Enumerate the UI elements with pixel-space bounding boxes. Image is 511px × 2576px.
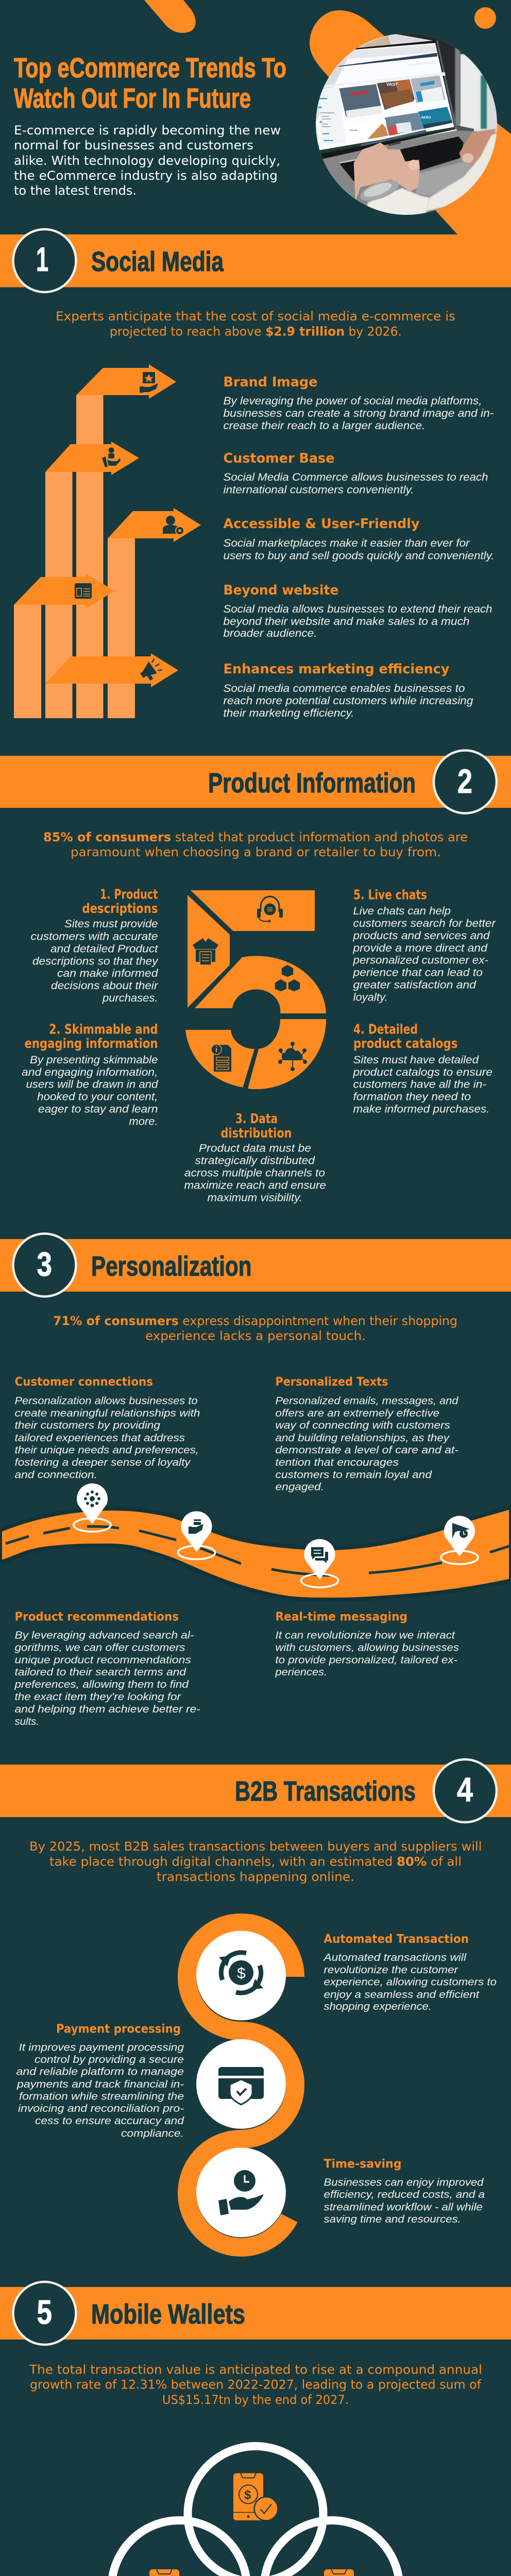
benefit: Customer Base: international customers conveniently.	[224, 484, 414, 496]
icon: headset chat	[257, 896, 283, 922]
intro paragraph: to the latest trends.	[14, 183, 137, 198]
feature: Customer connections: Customer connections	[14, 1376, 153, 1389]
feature: 5. Live chats: Live chats can help	[353, 905, 451, 917]
feature: Customer connections: their customers by providing	[14, 1420, 160, 1431]
diagram: S-shaped ribbon with icons	[187, 1923, 295, 2247]
feature: Customer connections: fostering a deeper sense of loyalty	[14, 1457, 191, 1468]
feature: Automated Transaction	[323, 1933, 497, 2012]
feature: 3. Data distribution: maximum visibility.	[207, 1192, 302, 1204]
feature: Automated Transaction: revolutionize the customer	[323, 1964, 458, 1976]
intro: B2B statistic: By 2025, most B2B sales transactions between buyers and suppliers will	[29, 1839, 482, 1854]
feature: Personalized Texts: Personalized Texts	[275, 1376, 388, 1389]
feature: Personalized Texts: and building relationships, as they	[275, 1432, 450, 1444]
feature: 2. Skimmable and engaging information: engaging information	[25, 1036, 158, 1052]
feature: Customer connections	[14, 1376, 200, 1481]
feature: 5. Live chats	[352, 887, 496, 1004]
benefit: Enhances marketing efficiency	[224, 662, 473, 719]
intro: mobile wallets statistic	[29, 2363, 482, 2407]
feature: Customer connections: their unique needs and preferences,	[14, 1445, 199, 1456]
feature: 4. Detailed product catalogs: 4. Detailed	[353, 1022, 418, 1038]
icon: user with gear	[163, 516, 184, 535]
icon: customer base	[102, 447, 121, 467]
icon: cloud network	[278, 1042, 307, 1071]
intro: mobile wallets statistic: The total transaction value is anticipated to rise at a compound annual	[29, 2363, 482, 2377]
feature: 2. Skimmable and engaging information: eager to stay and learn	[38, 1104, 158, 1115]
icon: automated dollar cycle	[219, 1953, 263, 1993]
icon: phone payment failed	[149, 2569, 194, 2576]
feature: Product recommendations: Product recommendations	[14, 1611, 179, 1624]
feature: Automated Transaction: enjoy a seamless and efficient	[323, 1989, 480, 2001]
feature: 1. Product descriptions: decisions about their	[51, 980, 159, 992]
benefit: Beyond website	[224, 583, 492, 639]
benefit: Brand Image	[224, 375, 493, 432]
feature: 1. Product descriptions: descriptions so that they	[32, 955, 159, 968]
section band: 3 Personalization: 3	[37, 1245, 52, 1283]
feature: Time-saving: streamlined workflow - all while	[323, 2202, 483, 2213]
benefit: Customer Base: Social Media Commerce allows businesses to reach	[224, 471, 488, 483]
title	[14, 53, 286, 114]
feature: 2. Skimmable and engaging information	[22, 1022, 159, 1127]
benefit: Brand Image: By leveraging the power of social media platforms,	[224, 395, 482, 407]
feature: 5. Live chats: customers search for better	[353, 918, 496, 929]
feature: 1. Product descriptions	[31, 887, 159, 1004]
section band: 4 B2B Transactions: 4	[457, 1770, 473, 1808]
pin: real-time messaging	[441, 1516, 478, 1564]
feature: Product recommendations: gorithms, we can offer customers	[14, 1642, 185, 1654]
feature: Personalized Texts: engaged.	[275, 1482, 324, 1493]
intro: social media statistic: projected to reach above $2.9 trillion by 2026.	[110, 325, 402, 339]
feature: Real-time messaging: Real-time messaging	[275, 1611, 407, 1624]
intro paragraph: E-commerce is rapidly becoming the new	[14, 123, 281, 138]
feature: 3. Data distribution: across multiple channels to	[184, 1167, 325, 1179]
feature: Payment processing: formation while streamlining the	[19, 2091, 184, 2102]
feature: 1. Product descriptions: and detailed Product	[50, 943, 159, 955]
feature: 3. Data distribution: 3. Data	[235, 1111, 278, 1127]
feature: Customer connections: create meaningful relationships with	[14, 1408, 200, 1419]
feature: Real-time messaging: to provide personalized, tailored ex-	[275, 1655, 457, 1666]
intro: product information statistic	[43, 830, 468, 859]
intro: personalization statistic: experience lacks a personal touch.	[145, 1329, 366, 1343]
icon: automated dollar cycle: $	[237, 1965, 246, 1982]
feature: Customer connections: and connection.	[14, 1469, 97, 1481]
benefit: Brand Image: Brand Image	[224, 375, 317, 390]
feature: Personalized Texts: offers are an extremely effective	[275, 1408, 439, 1419]
feature: Personalized Texts: demonstrate a level of care and at-	[275, 1445, 458, 1456]
section band: 5 Mobile Wallets: Mobile Wallets	[91, 2299, 245, 2330]
feature: Payment processing: invoicing and reconciliation pro-	[18, 2103, 184, 2114]
feature: 5. Live chats: greater satisfaction and	[353, 979, 476, 991]
decorative dot	[474, 7, 496, 29]
feature: 4. Detailed product catalogs: make informed purchases.	[353, 1104, 489, 1115]
feature: Payment processing: cess to ensure accuracy and	[35, 2115, 184, 2127]
icon: stacked cubes	[275, 964, 300, 992]
benefit: Customer Base: Customer Base	[224, 451, 335, 466]
icon: card with shield	[218, 2067, 264, 2105]
feature: Time-saving: saving time and resources.	[323, 2214, 461, 2225]
section band: 5 Mobile Wallets: 5	[37, 2293, 52, 2331]
benefit: Enhances marketing efficiency: reach more potential customers while increasing	[224, 695, 473, 707]
feature: 4. Detailed product catalogs: Sites must have detailed	[353, 1054, 479, 1066]
feature: 3. Data distribution: maximize reach and ensure	[184, 1180, 326, 1191]
section band: 2 Product Information: 2	[457, 762, 472, 800]
feature: 3. Data distribution: Product data must be	[199, 1143, 311, 1154]
benefit: Enhances marketing efficiency: Social media commerce enables businesses to	[224, 683, 465, 694]
feature: Payment processing: control by providing a secure	[35, 2054, 184, 2065]
pin: product recommendations	[178, 1511, 215, 1559]
intro: mobile wallets statistic: US$15.17tn by the end of 2027.	[162, 2393, 349, 2407]
intro paragraph: alike. With technology developing quickly,	[14, 154, 280, 168]
feature: Payment processing: and reliable platform to manage	[16, 2066, 184, 2077]
feature: 5. Live chats: perience that can lead to	[352, 967, 483, 979]
feature: 1. Product descriptions: purchases.	[102, 992, 158, 1004]
benefit: Accessible & User-Friendly: Social marketplaces make it easier than ever for	[224, 537, 470, 549]
section band: 4 B2B Transactions: B2B Transactions	[235, 1776, 416, 1807]
feature: Customer connections: Personalization allows businesses to	[14, 1395, 198, 1406]
feature: Automated Transaction: Automated Transaction	[323, 1933, 469, 1946]
feature: Real-time messaging: with customers, allowing businesses	[275, 1642, 459, 1654]
benefit: Enhances marketing efficiency: their marketing efficiency.	[224, 707, 354, 719]
diagram: winding road with map pins	[0, 1483, 511, 1600]
feature: 3. Data distribution: distribution	[220, 1126, 292, 1141]
section band: 3 Personalization	[0, 1233, 511, 1296]
feature: Time-saving: efficiency, reduced costs, and a	[323, 2189, 485, 2200]
pin: customer connections	[74, 1483, 111, 1532]
benefit: Accessible & User-Friendly	[224, 516, 495, 562]
feature: 4. Detailed product catalogs: product catalogs	[353, 1036, 457, 1052]
feature: Personalized Texts	[275, 1376, 458, 1493]
benefit: Brand Image: businesses can create a strong brand image and in-	[224, 408, 493, 419]
icon: phone payment success: $	[244, 2488, 251, 2502]
feature: Time-saving: Businesses can enjoy improved	[323, 2177, 484, 2189]
icon: phone payment success	[233, 2473, 278, 2520]
photo: hands typing on a laptop: Launch	[349, 129, 357, 131]
intro: B2B statistic: transactions happening online.	[157, 1870, 354, 1884]
panel: header	[14, 0, 511, 237]
feature: 5. Live chats: 5. Live chats	[353, 887, 427, 903]
intro: social media statistic: Experts anticipate that the cost of social media e-commerce is	[56, 309, 455, 324]
intro: B2B statistic: take place through digital channels, with an estimated 80% of all	[49, 1855, 462, 1869]
feature: Real-time messaging	[275, 1611, 459, 1678]
feature: 1. Product descriptions: customers with accurate	[31, 930, 158, 943]
feature: Product recommendations: and helping them achieve better re-	[14, 1704, 200, 1715]
icon: info document	[211, 1044, 231, 1072]
feature: 2. Skimmable and engaging information: more.	[129, 1116, 158, 1127]
section band: 1 Social Media	[0, 229, 511, 292]
feature: Personalized Texts: customers to remain loyal and	[275, 1469, 432, 1481]
feature: Product recommendations: unique product recommendations	[14, 1655, 191, 1666]
feature: 4. Detailed product catalogs: customers have all the in-	[353, 1079, 486, 1090]
feature: 1. Product descriptions: can make informed	[57, 968, 159, 979]
chart: rising arrows	[14, 364, 201, 718]
decorative capsule top	[144, 0, 196, 33]
icon: phone payment warning	[324, 2569, 369, 2576]
feature: 2. Skimmable and engaging information: hooked to your content,	[37, 1091, 158, 1103]
feature: 2. Skimmable and engaging information: and engaging information,	[22, 1066, 158, 1078]
section band: 1 Social Media: Social Media	[91, 246, 224, 277]
intro: product information statistic: paramount when choosing a brand or retailer to buy from.	[71, 845, 441, 859]
feature: Product recommendations: the exact item they're looking for	[14, 1691, 182, 1703]
icon: hand holding clock	[218, 2170, 264, 2215]
intro: mobile wallets statistic: growth rate of 12.31% between 2022-2027, leading to a projected sum of	[30, 2377, 482, 2392]
feature: 1. Product descriptions: Sites must provide	[64, 918, 158, 930]
intro: personalization statistic	[53, 1314, 457, 1343]
feature: 5. Live chats: loyalty.	[353, 991, 387, 1004]
section band: 5 Mobile Wallets	[0, 2282, 511, 2345]
intro: product information statistic: 85% of consumers stated that product information and photos are	[43, 830, 468, 844]
feature: Product recommendations: sults.	[14, 1716, 39, 1727]
feature: Payment processing	[16, 2023, 184, 2139]
feature: Product recommendations	[14, 1611, 200, 1727]
benefit: Beyond website: Social media allows businesses to extend their reach	[224, 603, 492, 615]
feature: Automated Transaction: Automated transactions will	[323, 1952, 467, 1963]
pin: personalized texts	[301, 1539, 338, 1587]
feature: 2. Skimmable and engaging information: 2. Skimmable and	[49, 1022, 158, 1038]
feature: Automated Transaction: shopping experience.	[323, 2001, 432, 2012]
icon: brand image	[140, 372, 158, 393]
title: Watch Out For In Future	[14, 83, 251, 114]
feature: Payment processing: payments and track financial in-	[16, 2079, 184, 2090]
feature: Product recommendations: tailored to their search terms and	[14, 1667, 186, 1678]
feature: Time-saving	[323, 2158, 485, 2225]
diagram: three interlocking rings with phone icons	[111, 2446, 400, 2576]
benefit: Accessible & User-Friendly: Accessible & User-Friendly	[224, 516, 420, 532]
benefit: Beyond website: broader audience.	[224, 628, 317, 639]
icon: megaphone	[138, 657, 164, 683]
intro paragraph	[14, 123, 281, 198]
feature: Payment processing: Payment processing	[56, 2023, 181, 2036]
section band: 1 Social Media: 1	[36, 240, 48, 278]
decorative capsule behind photo	[310, 10, 511, 237]
photo: hands typing on a laptop: AERO	[421, 116, 431, 120]
feature: Real-time messaging: It can revolutionize how we interact	[275, 1630, 456, 1641]
feature: Customer connections: tailored experiences that address	[14, 1432, 185, 1444]
feature: 3. Data distribution: strategically distributed	[195, 1155, 315, 1166]
feature: 5. Live chats: provide a more direct and	[352, 942, 488, 954]
section band: 2 Product Information: Product Information	[208, 768, 416, 799]
feature: 4. Detailed product catalogs: formation they need to	[353, 1091, 471, 1103]
intro: B2B statistic	[29, 1839, 482, 1884]
section band: 2 Product Information	[0, 750, 511, 813]
benefit: Customer Base	[224, 451, 488, 496]
benefit: Accessible & User-Friendly: users to buy and sell goods quickly and conveniently.	[224, 550, 495, 562]
section band: 4 B2B Transactions	[0, 1759, 511, 1822]
feature: 1. Product descriptions: descriptions	[82, 901, 158, 917]
photo: hands typing on a laptop	[314, 31, 500, 218]
feature: 2. Skimmable and engaging information: users will be drawn in and	[26, 1079, 159, 1090]
intro paragraph: the eCommerce industry is also adapting	[14, 168, 278, 183]
feature: 2. Skimmable and engaging information: By presenting skimmable	[30, 1054, 158, 1066]
feature: 5. Live chats: personalized customer ex-	[352, 954, 488, 967]
feature: 4. Detailed product catalogs	[352, 1022, 492, 1115]
icon: browser window	[75, 583, 92, 599]
benefit: Enhances marketing efficiency: Enhances marketing efficiency	[224, 662, 450, 677]
feature: Personalized Texts: Personalized emails, messages, and	[275, 1395, 458, 1406]
photo: hands typing on a laptop: VAST	[386, 82, 398, 87]
feature: 5. Live chats: products and services and	[352, 930, 490, 942]
feature: 4. Detailed product catalogs: product catalogs to ensure	[352, 1066, 492, 1078]
feature: 3. Data distribution	[184, 1111, 326, 1204]
benefit: Brand Image: crease their reach to a larger audience.	[224, 420, 425, 432]
feature: Product recommendations: By leveraging advanced search al-	[14, 1630, 194, 1641]
title: Top eCommerce Trends To	[14, 53, 286, 83]
benefit: Beyond website: Beyond website	[224, 583, 339, 598]
icon: box with checklist	[193, 938, 218, 965]
feature: Time-saving: Time-saving	[323, 2158, 402, 2171]
feature: Payment processing: compliance.	[121, 2128, 184, 2139]
feature: Payment processing: It improves payment processing	[19, 2042, 184, 2054]
feature: Real-time messaging: periences.	[275, 1667, 327, 1678]
benefit: Beyond website: beyond their website and make sales to a much	[224, 616, 470, 628]
feature: Personalized Texts: way of connecting with customers	[275, 1420, 450, 1431]
intro: social media statistic	[56, 309, 455, 339]
intro: personalization statistic: 71% of consumers express disappointment when their shopping	[53, 1314, 457, 1328]
intro paragraph: normal for businesses and customers	[14, 138, 253, 152]
feature: Personalized Texts: tention that encourages	[275, 1457, 399, 1468]
feature: Product recommendations: preferences, allowing them to find	[14, 1679, 189, 1690]
feature: Automated Transaction: experience, allowing customers to	[323, 1976, 497, 1988]
feature: 1. Product descriptions: 1. Product	[100, 887, 158, 903]
section band: 3 Personalization: Personalization	[91, 1251, 251, 1282]
diagram: number five segmented	[185, 890, 326, 1089]
